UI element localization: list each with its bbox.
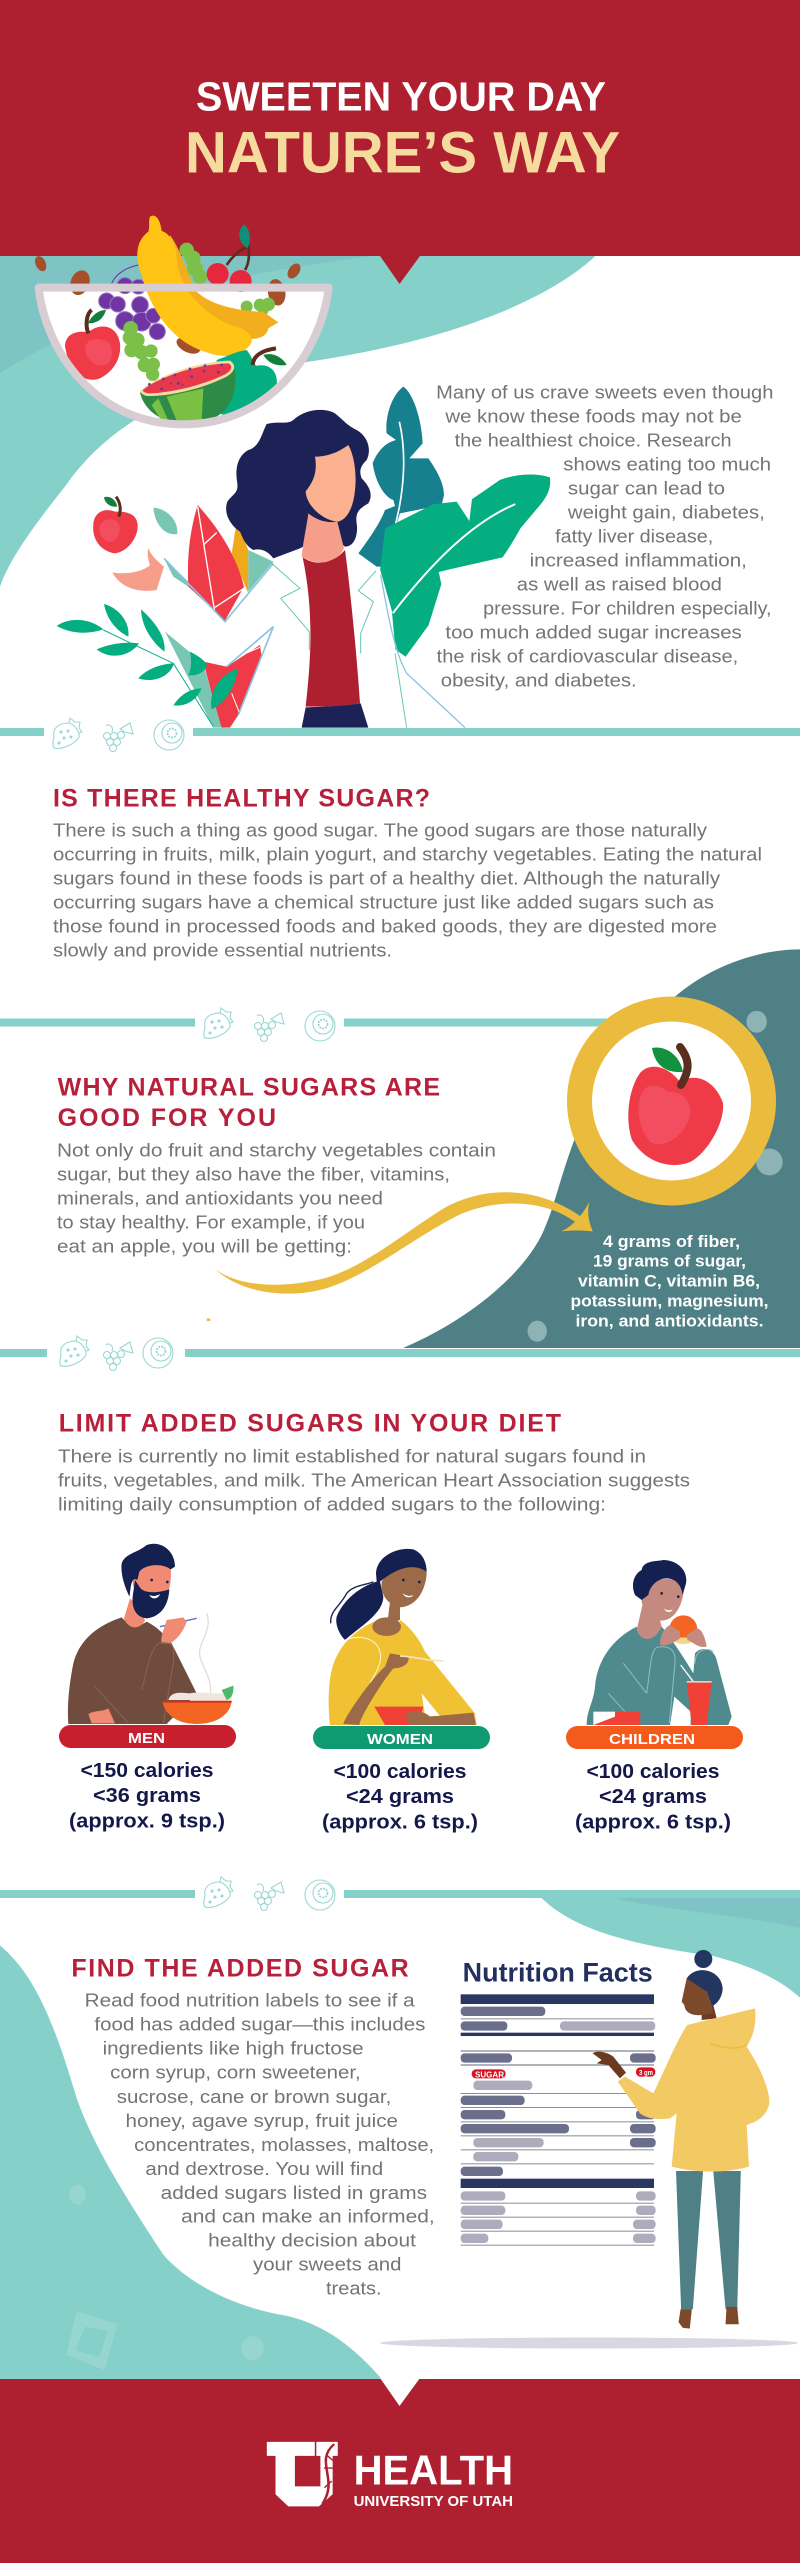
sugar callouts: 3 gm (639, 2068, 653, 2077)
intro paragraph: increased inflammation, (530, 550, 747, 570)
neck (302, 513, 344, 562)
divider with fruit icons 1 (0, 718, 800, 752)
nutrition facts label (461, 1994, 656, 2246)
paragraph: find the added sugar (85, 1991, 435, 2299)
ground shadow (380, 2338, 798, 2348)
illustration: big tropical leaves (358, 387, 550, 657)
intro paragraph: weight gain, diabetes, (567, 502, 765, 522)
paragraph: natural sugars: eat an apple, you will be getting: (57, 1236, 352, 1256)
paragraph: find the added sugar: concentrates, molasses, maltose, (134, 2135, 434, 2155)
illustration: man eating noodles (68, 1544, 233, 1724)
stats: men: <36 grams (93, 1785, 201, 1807)
header banner (0, 0, 800, 284)
label text: men: MEN (128, 1730, 165, 1747)
paragraph: natural sugars: minerals, and antioxidants you need (57, 1188, 383, 1208)
paragraph: find the added sugar: sucrose, cane or brown sugar, (117, 2087, 391, 2107)
hand (112, 548, 164, 591)
intro paragraph: as well as raised blood (517, 574, 722, 594)
intro paragraph (436, 382, 773, 690)
label text: children: CHILDREN (609, 1731, 695, 1748)
stats: men (69, 1760, 225, 1832)
apple nutrients list (570, 1232, 768, 1330)
paragraph: find the added sugar: and dextrose. You will find (145, 2159, 383, 2179)
stats: women (322, 1761, 478, 1834)
intro paragraph: the healthiest choice. Research (455, 430, 732, 450)
paragraph: limit added sugars: There is currently no limit established for natural sugars found in (58, 1446, 646, 1466)
paragraph: healthy sugar: There is such a thing as good sugar. The good sugars are those naturally (53, 821, 707, 841)
paragraph: find the added sugar: ingredients like high fructose (103, 2039, 364, 2059)
divider with fruit icons 2 (0, 1008, 634, 1042)
shirt (303, 550, 360, 707)
apple nutrients list: 4 grams of fiber, (603, 1232, 740, 1251)
intro paragraph: Many of us crave sweets even though (436, 382, 773, 402)
paragraph: healthy sugar: those found in processed foods and baked goods, they are digested more (53, 916, 717, 936)
bottom teal waves (0, 1897, 800, 2380)
stats: children (575, 1761, 731, 1834)
lower sleeve pattern (165, 627, 273, 728)
intro paragraph: obesity, and diabetes. (441, 670, 637, 690)
nutrition facts title: Nutrition Facts (463, 1958, 653, 1988)
stats: women: <100 calories (334, 1761, 466, 1783)
intro paragraph: sugar can lead to (568, 478, 725, 498)
heading: why natural sugars: WHY NATURAL SUGARS ARE (58, 1073, 440, 1101)
intro paragraph: pressure. For children especially, (483, 598, 772, 618)
paragraph: healthy sugar: occurring in fruits, milk, plain yogurt, and starchy vegetables. Eating the natural (53, 845, 762, 865)
heading: find the added sugar: FIND THE ADDED SUGAR (71, 1955, 409, 1983)
paragraph: limit added sugars: fruits, vegetables, and milk. The American Heart Association suggests (58, 1470, 690, 1490)
stats: children: <24 grams (599, 1786, 707, 1808)
label text: women: WOMEN (367, 1731, 433, 1748)
illustration: woman reading label (593, 1950, 769, 2329)
panel: children (566, 1560, 743, 1834)
label pill: men (59, 1725, 236, 1748)
paragraph: limit added sugars: limiting daily consumption of added sugars to the following: (58, 1494, 606, 1514)
top teal wave background (0, 252, 599, 586)
label pill: children (566, 1726, 743, 1749)
sugar callouts (475, 2068, 653, 2080)
title: NATURE’S WAY (185, 121, 620, 186)
intro paragraph: fatty liver disease, (555, 526, 713, 546)
paragraph: healthy sugar: occurring sugars have a chemical structure just like added sugars such as (53, 892, 714, 912)
heading: is there healthy sugar: IS THERE HEALTHY SUGAR? (53, 784, 430, 812)
stats: men: (approx. 9 tsp.) (69, 1810, 225, 1832)
panel: men (59, 1544, 236, 1832)
intro paragraph: shows eating too much (563, 454, 771, 474)
stats: men: <150 calories (80, 1760, 214, 1782)
stats: children: (approx. 6 tsp.) (575, 1812, 731, 1834)
coat collar lines (272, 563, 407, 728)
stats: children: <100 calories (586, 1761, 720, 1783)
panel: women (313, 1549, 490, 1834)
illustration: woman with white coat and fruit (57, 410, 465, 728)
intro paragraph: too much added sugar increases (445, 622, 742, 642)
apple nutrients list: iron, and antioxidants. (576, 1312, 764, 1330)
floating apple (93, 497, 138, 553)
apple nutrients list: vitamin C, vitamin B6, (578, 1272, 760, 1290)
paragraph: limit added sugars (58, 1446, 690, 1514)
paragraph: healthy sugar (53, 821, 762, 960)
paragraph: healthy sugar: slowly and provide essential nutrients. (53, 940, 392, 960)
intro paragraph: we know these foods may not be (444, 406, 742, 426)
paragraph: natural sugars: to stay healthy. For example, if you (57, 1212, 365, 1232)
paragraph: find the added sugar: honey, agave syrup, fruit juice (126, 2111, 398, 2131)
title (185, 74, 620, 186)
paragraph: find the added sugar: added sugars listed in grams (161, 2183, 427, 2203)
face (306, 445, 356, 522)
legs and feet (676, 2171, 741, 2329)
paragraph: natural sugars: Not only do fruit and starchy vegetables contain (57, 1140, 496, 1160)
green leaf (380, 475, 550, 657)
intro paragraph: the risk of cardiovascular disease, (437, 646, 738, 666)
upper sleeve pattern (164, 505, 273, 622)
paragraph: find the added sugar: Read food nutrition labels to see if a (85, 1991, 416, 2011)
divider with fruit icons 3 (0, 1336, 800, 1370)
teal leaf (358, 387, 444, 567)
divider with fruit icons 4 (0, 1877, 800, 1910)
small floating leaf (153, 508, 177, 534)
logo wordmark: UNIVERSITY OF UTAH (354, 2493, 513, 2510)
paragraph: find the added sugar: healthy decision about (208, 2231, 416, 2251)
paragraph: find the added sugar: and can make an informed, (181, 2206, 435, 2226)
hair (226, 410, 371, 558)
label pill: women (313, 1726, 490, 1749)
logo wordmark: HEALTH (354, 2446, 513, 2494)
pants (302, 703, 368, 728)
title: SWEETEN YOUR DAY (196, 74, 606, 120)
dark teal blob panel (403, 949, 800, 1348)
sugar callouts: SUGAR (475, 2070, 504, 2080)
illustration: fruit bowl (33, 216, 329, 424)
leafy branch (57, 604, 238, 727)
paragraph: find the added sugar: treats. (326, 2279, 382, 2299)
stats: women: (approx. 6 tsp.) (322, 1812, 478, 1834)
apple nutrients list: 19 grams of sugar, (593, 1252, 746, 1271)
footer banner (0, 2378, 800, 2563)
heading: why natural sugars (58, 1073, 440, 1132)
apple nutrients list: potassium, magnesium, (570, 1292, 768, 1311)
logo mark: block U with helix (267, 2442, 338, 2506)
paragraph: find the added sugar: food has added sugar—this includes (94, 2015, 425, 2035)
heading: limit added sugars: LIMIT ADDED SUGARS IN YOUR DIET (59, 1410, 561, 1438)
illustration: woman eating with spoon (329, 1549, 477, 1725)
logo: university of utah health (267, 2442, 513, 2510)
upper body (593, 1950, 769, 2172)
apple in yellow ring (580, 1009, 764, 1193)
paragraph: find the added sugar: your sweets and (253, 2255, 402, 2275)
paragraph: natural sugars: sugar, but they also have the fiber, vitamins, (57, 1164, 450, 1184)
stats: women: <24 grams (346, 1786, 454, 1808)
paragraph: healthy sugar: sugars found in these foods is part of a healthy diet. Although the naturally (53, 869, 720, 889)
yellow curved arrow (207, 1192, 593, 1321)
paragraph: find the added sugar: corn syrup, corn sweetener, (110, 2063, 361, 2083)
heading: why natural sugars: GOOD FOR YOU (58, 1104, 276, 1132)
paragraph: natural sugars (57, 1140, 496, 1256)
illustration: child eating burger (587, 1560, 732, 1725)
